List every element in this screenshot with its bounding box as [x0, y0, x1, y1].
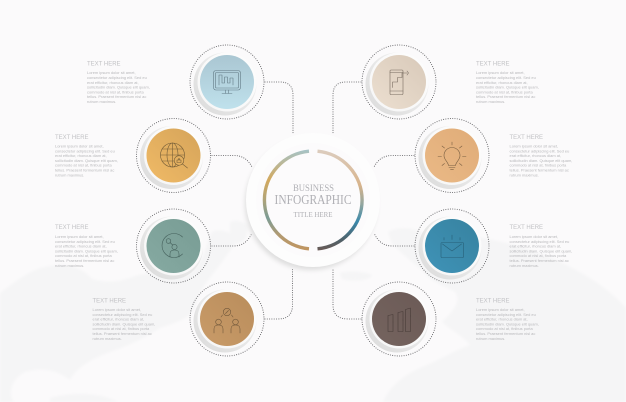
icon: person and orbit: [162, 234, 182, 258]
connector: upper left: [212, 156, 252, 167]
text block: top right: rutrum maximus.: [476, 99, 505, 104]
text block: upper left: [55, 135, 118, 177]
icon: phone with rising arrow: [390, 70, 408, 94]
text block: bottom left: tellus. Praesent fermentum nisl ac: [92, 331, 152, 336]
node: bar chart: [362, 282, 436, 356]
hub title: INFOGRAPHIC: [274, 193, 352, 208]
icon: rising bars: [388, 308, 410, 332]
text block: top left: tellus. Praesent fermentum nisl ac: [87, 94, 146, 99]
text block: lower right: rutrum maximus.: [510, 263, 539, 268]
text block: top left: consectetur adipiscing elit. Sed eu: [87, 75, 147, 80]
text block: upper right: consectetur adipiscing elit. Sed eu: [510, 148, 569, 153]
text block: top left: TEXT HERE: [87, 62, 121, 68]
text block: top left: sollicitudin diam. Quisque elit quam,: [87, 85, 150, 90]
text block: upper right: commodo at nisl at, finibus porta: [510, 163, 567, 168]
text block: lower right: sollicitudin diam. Quisque elit quam,: [510, 248, 572, 253]
text block: bottom right: commodo at nisl at, finibus porta: [476, 326, 533, 331]
text block: bottom right: tellus. Praesent fermentum nisl ac: [476, 331, 535, 336]
text block: lower left: Lorem ipsum dolor sit amet,: [55, 234, 104, 239]
text block: upper left: commodo at nisl at, finibus porta: [55, 163, 112, 168]
text block: lower left: commodo at nisl at, finibus porta: [55, 253, 112, 258]
icon: two people connected: [214, 308, 240, 333]
text block: top right: [476, 62, 539, 104]
node: phone growth: [362, 45, 436, 119]
text block: upper left: rutrum maximus.: [55, 172, 84, 177]
hub title: BUSINESS: [293, 184, 334, 194]
text block: lower right: TEXT HERE: [510, 225, 543, 231]
text block: upper right: erat efficitur, rhoncus diam at,: [510, 153, 561, 158]
text block: bottom right: erat efficitur, rhoncus diam at,: [476, 317, 528, 322]
text block: top left: Lorem ipsum dolor sit amet,: [87, 70, 136, 75]
text block: bottom right: TEXT HERE: [476, 298, 510, 304]
text block: upper right: [510, 135, 572, 177]
text block: bottom left: erat efficitur, rhoncus diam at,: [92, 317, 144, 322]
text block: bottom left: sollicitudin diam. Quisque elit quam,: [92, 321, 155, 326]
text block: bottom right: consectetur adipiscing elit. Sed eu: [476, 312, 536, 317]
text block: bottom left: consectetur adipiscing elit. Sed eu: [92, 312, 152, 317]
icon: envelope: [441, 235, 464, 258]
node: mail: [415, 209, 489, 283]
text block: bottom left: [92, 298, 155, 341]
connector: lower right: [374, 233, 414, 246]
connector: upper right: [374, 156, 414, 167]
text block: bottom left: rutrum maximus.: [92, 336, 122, 341]
node: person in orbit: [136, 209, 210, 283]
text block: upper left: consectetur adipiscing elit. Sed eu: [55, 148, 115, 153]
node: monitor chart: [190, 45, 264, 119]
text block: upper left: Lorem ipsum dolor sit amet,: [55, 144, 104, 148]
ring: left arc: [264, 151, 309, 249]
text block: upper right: TEXT HERE: [510, 135, 543, 141]
text block: lower right: Lorem ipsum dolor sit amet,: [510, 234, 558, 239]
text block: upper left: TEXT HERE: [55, 135, 89, 141]
text block: bottom left: commodo at nisl at, finibus porta: [92, 326, 150, 331]
text block: upper right: sollicitudin diam. Quisque elit quam,: [510, 158, 572, 163]
icon: light bulb: [438, 142, 466, 169]
text block: lower left: sollicitudin diam. Quisque elit quam,: [55, 248, 118, 253]
icon: globe with magnifier: [160, 143, 188, 168]
text block: upper right: Lorem ipsum dolor sit amet,: [510, 144, 558, 148]
icon: monitor chart: [214, 70, 240, 94]
text block: top right: Lorem ipsum dolor sit amet,: [476, 70, 525, 75]
connector: bottom left: [265, 268, 292, 319]
text block: lower right: consectetur adipiscing elit. Sed eu: [510, 239, 569, 244]
text block: lower left: erat efficitur, rhoncus diam at,: [55, 244, 107, 249]
text block: bottom left: TEXT HERE: [92, 298, 126, 304]
text block: bottom right: rutrum maximus.: [476, 336, 505, 341]
text block: upper left: tellus. Praesent fermentum nisl ac: [55, 168, 114, 172]
ring: right arc: [318, 151, 362, 249]
text block: upper left: erat efficitur, rhoncus diam at,: [55, 153, 107, 158]
connector: bottom right: [333, 268, 361, 319]
text block: top right: consectetur adipiscing elit. Sed eu: [476, 75, 536, 80]
text block: lower left: tellus. Praesent fermentum nisl ac: [55, 258, 114, 263]
text block: lower left: consectetur adipiscing elit. Sed eu: [55, 239, 115, 244]
connector: top right: [333, 82, 361, 133]
text block: lower right: commodo at nisl at, finibus porta: [510, 253, 567, 258]
text block: lower left: rutrum maximus.: [55, 263, 84, 268]
hub title: TITLE HERE: [294, 210, 333, 219]
text block: top right: erat efficitur, rhoncus diam at,: [476, 80, 528, 85]
text block: top left: [87, 62, 150, 104]
text block: lower right: tellus. Praesent fermentum nisl ac: [510, 258, 569, 263]
text block: upper right: tellus. Praesent fermentum nisl ac: [510, 168, 569, 172]
text block: bottom left: Lorem ipsum dolor sit amet,: [92, 307, 141, 312]
text block: upper right: rutrum maximus.: [510, 172, 539, 177]
text block: lower right: [510, 225, 572, 268]
text block: bottom right: sollicitudin diam. Quisque elit quam,: [476, 321, 539, 326]
text block: top right: tellus. Praesent fermentum nisl ac: [476, 94, 535, 99]
text block: bottom right: [476, 298, 539, 341]
connector: lower left: [212, 233, 252, 246]
text block: lower left: TEXT HERE: [55, 225, 89, 231]
text block: lower left: [55, 225, 118, 268]
world map silhouette: [0, 221, 626, 402]
connector: top left: [265, 82, 293, 133]
text block: top left: commodo at nisl at, finibus porta: [87, 89, 144, 94]
text block: top left: erat efficitur, rhoncus diam at,: [87, 80, 139, 85]
text block: upper left: sollicitudin diam. Quisque elit quam,: [55, 158, 118, 163]
text block: top right: commodo at nisl at, finibus porta: [476, 89, 533, 94]
text block: top right: sollicitudin diam. Quisque elit quam,: [476, 85, 539, 90]
hub title: [274, 184, 352, 219]
text block: bottom right: Lorem ipsum dolor sit amet,: [476, 307, 525, 312]
node: light bulb: [415, 118, 489, 192]
text block: top left: rutrum maximus.: [87, 99, 116, 104]
node: two people: [190, 282, 264, 356]
text block: top right: TEXT HERE: [476, 62, 510, 68]
text block: lower right: erat efficitur, rhoncus diam at,: [510, 244, 561, 249]
node: globe search: [136, 118, 210, 192]
center hub: [245, 133, 380, 270]
